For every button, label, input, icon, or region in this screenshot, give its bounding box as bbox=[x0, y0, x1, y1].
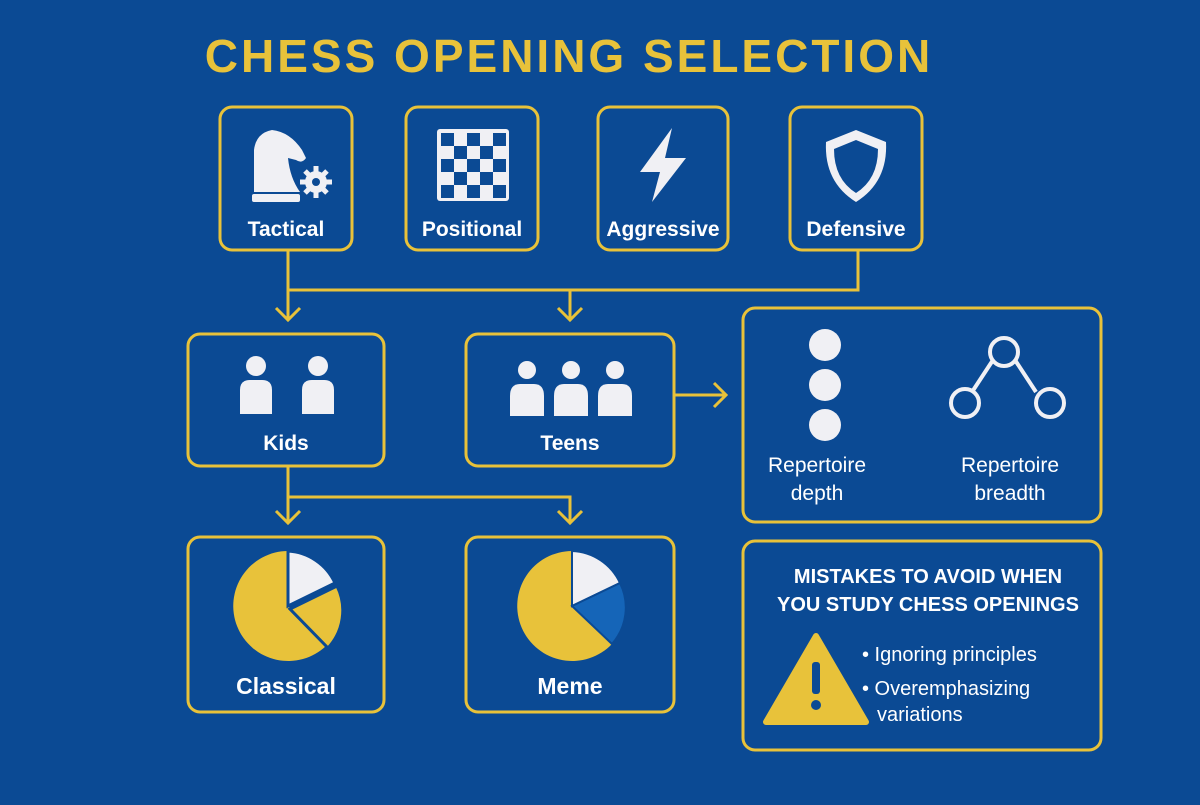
card: Classical bbox=[188, 537, 384, 712]
title: CHESS OPENING SELECTION bbox=[205, 30, 933, 82]
card: Teens bbox=[466, 334, 674, 466]
card: Kids: Kids bbox=[263, 432, 309, 455]
card: Meme: Meme bbox=[537, 673, 603, 699]
bullet list bbox=[862, 644, 1037, 726]
icon: three people bbox=[510, 361, 632, 416]
card: Kids bbox=[188, 334, 384, 466]
bullet list: variations bbox=[877, 704, 963, 726]
panel: repertoire: Repertoire bbox=[961, 454, 1059, 477]
card: Tactical bbox=[220, 107, 352, 250]
card: Defensive: Defensive bbox=[806, 218, 906, 241]
icon: shield bbox=[826, 130, 886, 202]
panel: repertoire bbox=[743, 308, 1101, 522]
card: Teens: Teens bbox=[540, 432, 600, 455]
panel: mistakes bbox=[743, 541, 1101, 750]
panel: mistakes: YOU STUDY CHESS OPENINGS bbox=[777, 594, 1079, 616]
panel: repertoire: Repertoire bbox=[768, 454, 866, 477]
card: Meme bbox=[466, 537, 674, 712]
card: Aggressive: Aggressive bbox=[606, 218, 720, 241]
card: Positional bbox=[406, 107, 538, 250]
card: Aggressive bbox=[598, 107, 728, 250]
icon: knight with gear bbox=[252, 130, 332, 202]
pie chart: meme bbox=[517, 551, 626, 661]
card: Tactical: Tactical bbox=[248, 218, 324, 241]
icon: breadth nodes bbox=[951, 338, 1064, 417]
icon: chessboard bbox=[437, 129, 509, 201]
icon: depth circles bbox=[809, 329, 841, 441]
card: Positional: Positional bbox=[422, 218, 522, 241]
panel: repertoire: breadth bbox=[974, 482, 1046, 505]
connectors bbox=[276, 250, 858, 523]
panel: mistakes: MISTAKES TO AVOID WHEN bbox=[794, 566, 1062, 588]
panel: repertoire: depth bbox=[791, 482, 843, 505]
icon: warning triangle bbox=[766, 636, 866, 722]
bullet list: • Ignoring principles bbox=[862, 644, 1037, 666]
card: Classical: Classical bbox=[236, 673, 336, 699]
icon: two people bbox=[240, 356, 334, 414]
icon: lightning bbox=[640, 128, 686, 202]
bullet list: • Overemphasizing bbox=[862, 678, 1030, 700]
card: Defensive bbox=[790, 107, 922, 250]
pie chart: classical bbox=[233, 551, 343, 661]
